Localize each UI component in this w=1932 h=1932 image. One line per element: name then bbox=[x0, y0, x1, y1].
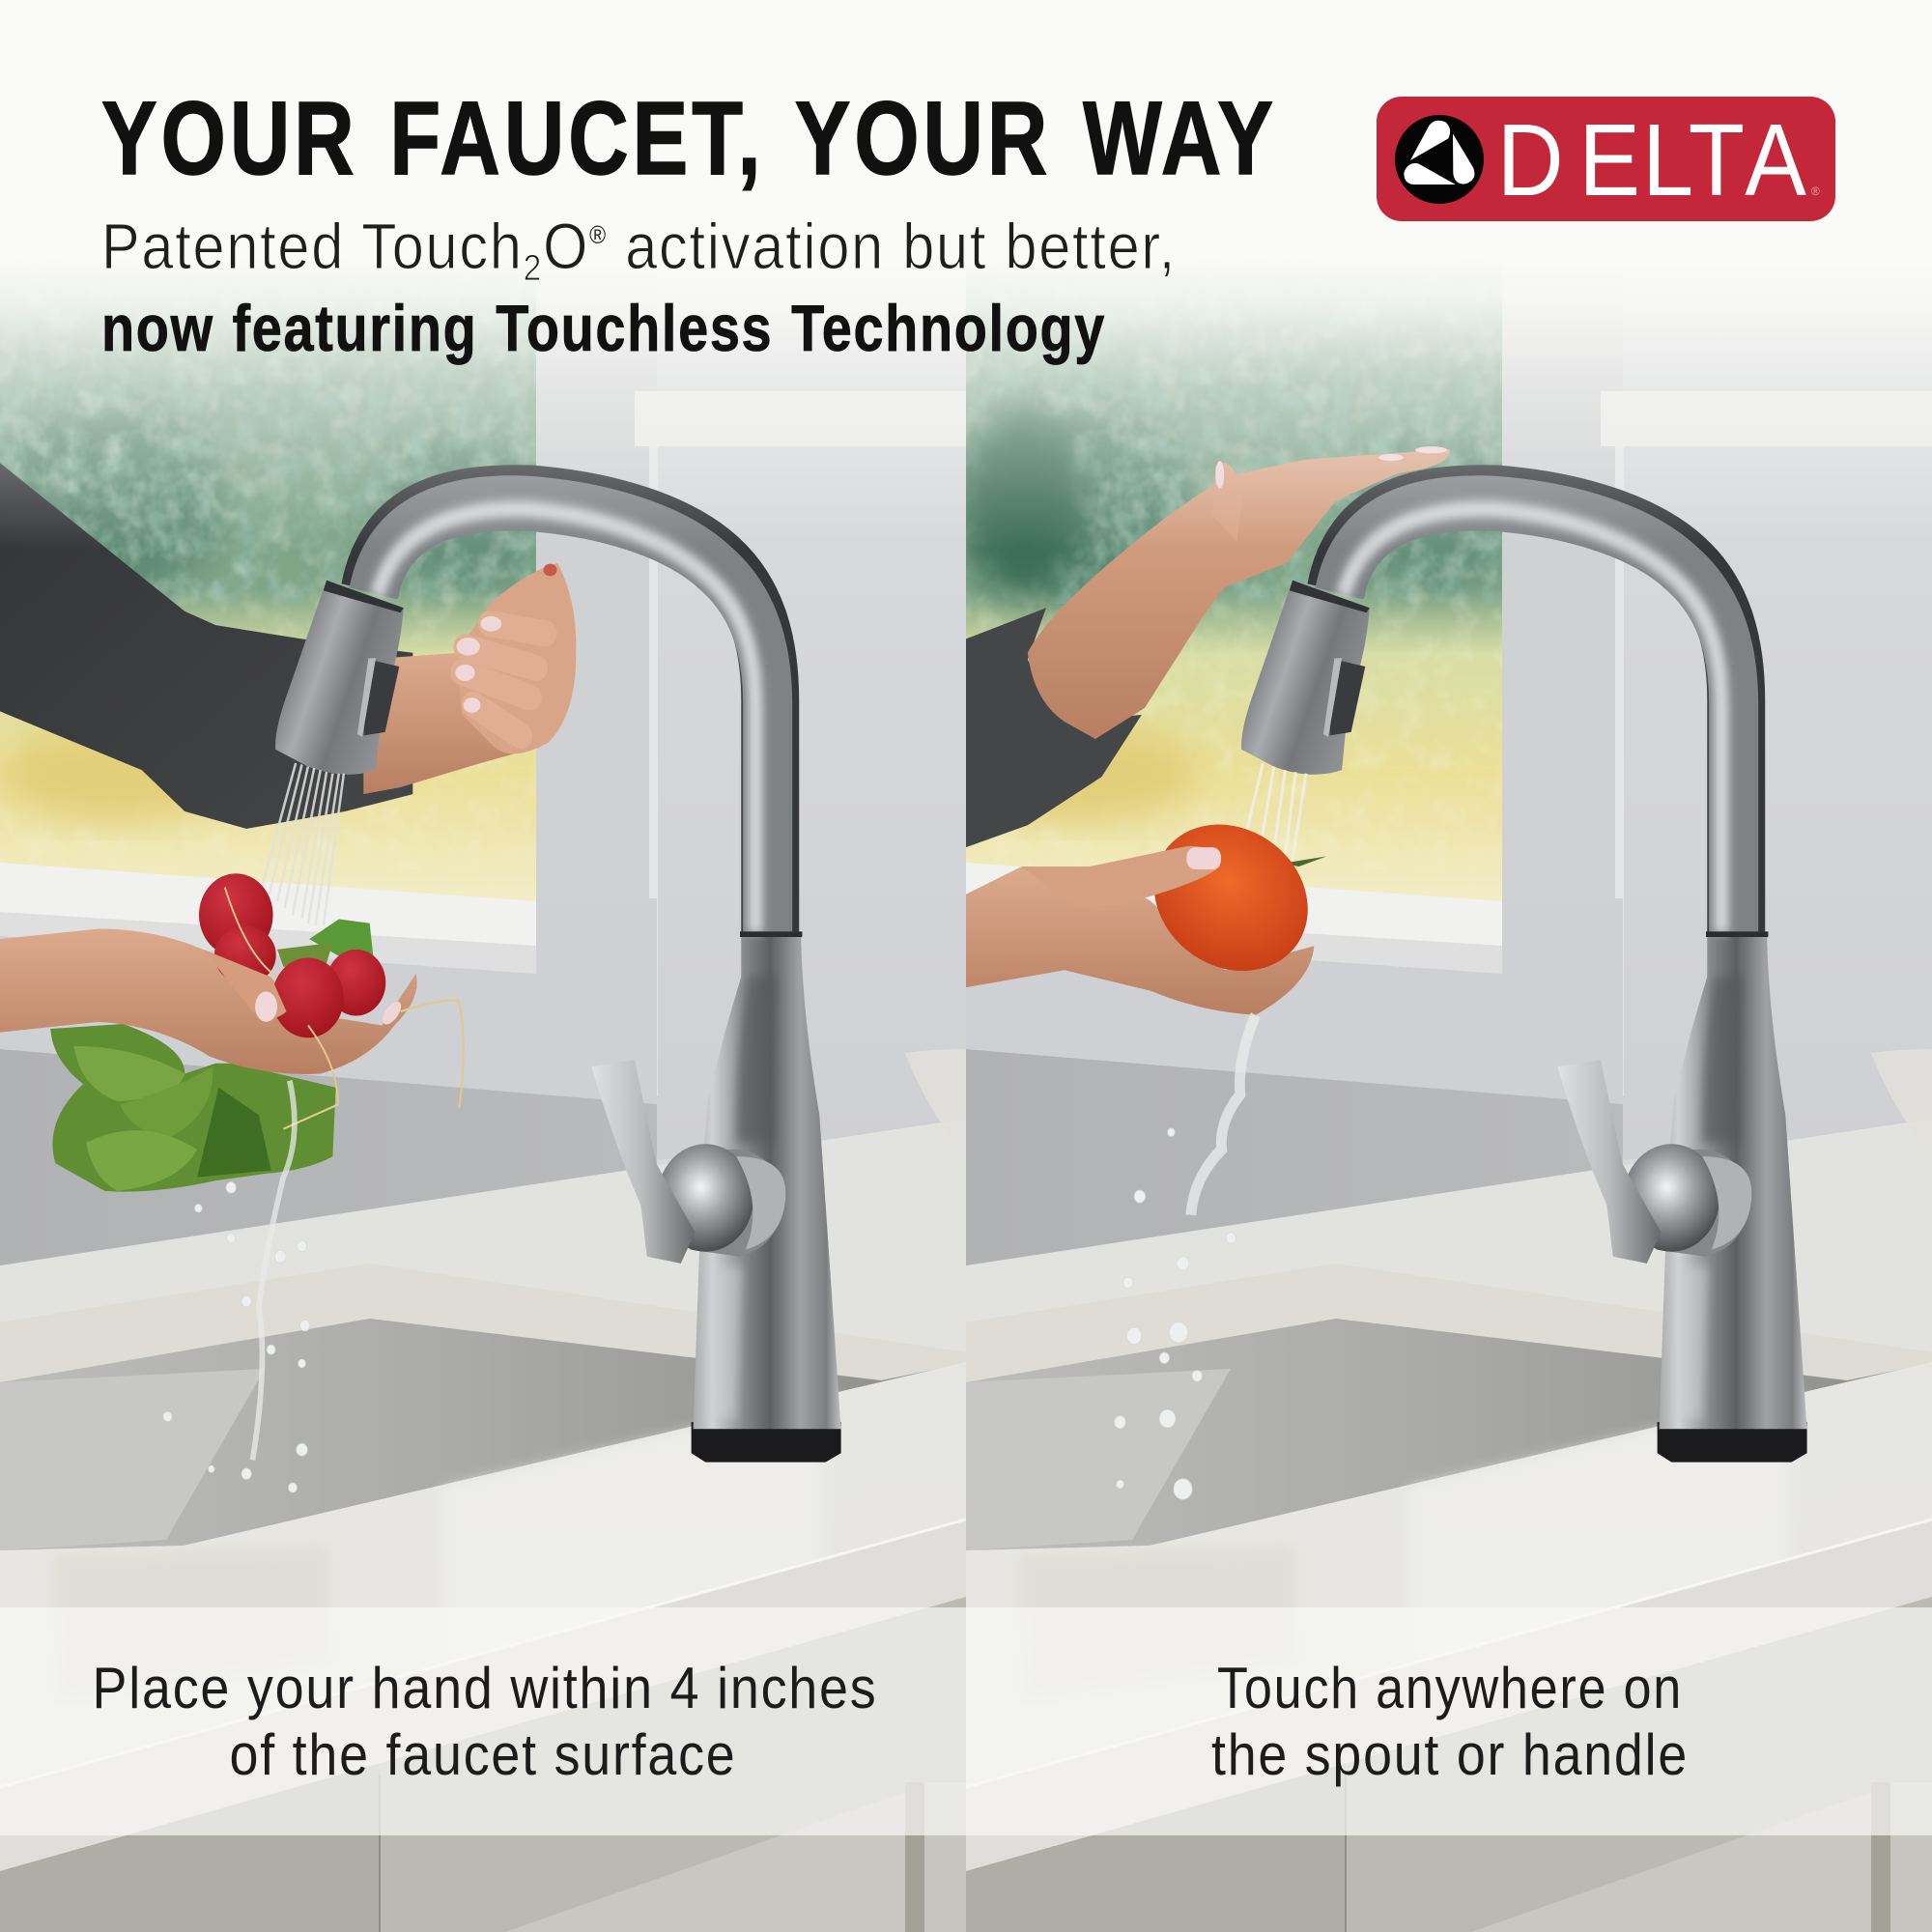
caption right: the spout or handle bbox=[1211, 1722, 1689, 1787]
radish greens bbox=[50, 919, 374, 1192]
kitchen background left bbox=[0, 288, 966, 1932]
arm and sleeve behind faucet bbox=[0, 463, 530, 829]
subtitle block: O bbox=[543, 211, 589, 283]
raised arm touching spout bbox=[966, 446, 1450, 847]
lower hand holding radishes bbox=[0, 873, 464, 1129]
lower hand and tomato bbox=[966, 825, 1326, 1015]
subtitle block: 2 bbox=[524, 248, 543, 289]
title: YOUR FAUCET, YOUR WAY bbox=[101, 79, 1277, 196]
caption band bbox=[0, 1607, 1932, 1835]
caption right: Touch anywhere on bbox=[1217, 1656, 1683, 1720]
logo: Delta: DELTA bbox=[1497, 103, 1807, 217]
logo: Delta: ® bbox=[1811, 185, 1820, 198]
top fade behind heading bbox=[0, 0, 1932, 551]
caption left bbox=[93, 1656, 877, 1787]
faucet left bbox=[275, 497, 841, 1463]
panel: right scene, touch anywhere bbox=[966, 288, 1932, 1932]
subtitle block: activation but better, bbox=[608, 211, 1177, 283]
caption left: Place your hand within 4 inches bbox=[93, 1656, 877, 1720]
subtitle block: ® bbox=[589, 220, 608, 249]
faucet right bbox=[1241, 497, 1807, 1463]
caption right bbox=[1211, 1656, 1689, 1787]
kitchen background right bbox=[966, 288, 1932, 1932]
panel: left scene, hand within 4 inches bbox=[0, 288, 966, 1932]
caption left: of the faucet surface bbox=[230, 1722, 736, 1787]
logo: Delta bbox=[1377, 97, 1835, 221]
water spray on tomato bbox=[1246, 763, 1306, 860]
dark trees in right window bbox=[961, 406, 1087, 599]
raised hand near spout bbox=[455, 563, 576, 753]
falling water left bbox=[163, 1081, 310, 1492]
subtitle block: now featuring Touchless Technology bbox=[101, 292, 1106, 365]
falling water right bbox=[1115, 1015, 1256, 1499]
subtitle block: Patented Touch bbox=[101, 211, 577, 283]
subtitle block bbox=[101, 211, 1177, 365]
water spray from spout bbox=[262, 763, 344, 925]
